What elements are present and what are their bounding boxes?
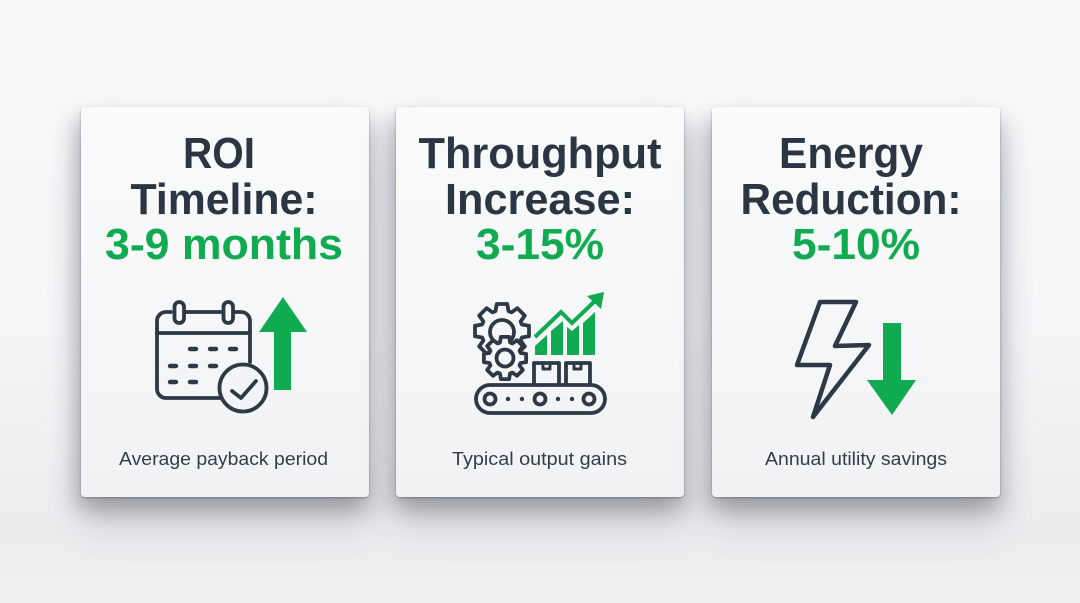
heading: Energy Reduction: Energy	[779, 129, 924, 178]
panel: throughput card	[396, 107, 684, 497]
icon: gears and conveyor	[475, 304, 605, 413]
heading: Throughput Increase: Increase:	[445, 175, 635, 224]
icon: green down arrow	[867, 323, 916, 415]
value: 5-10%: 5-10%	[792, 220, 920, 269]
icon: calendar with check	[157, 302, 266, 412]
value: 3-9 months: 3-9 months	[105, 220, 343, 269]
heading: Energy Reduction: Reduction:	[740, 175, 962, 224]
heading: Energy Reduction	[740, 129, 962, 224]
icon: green growth chart	[535, 292, 604, 355]
heading: Throughput Increase: Throughput	[418, 129, 662, 178]
heading: ROI Timeline	[130, 129, 318, 224]
heading: Throughput Increase	[418, 129, 662, 224]
value: 3-15%: 3-15%	[476, 220, 604, 269]
caption: average payback period: Average payback period	[119, 449, 328, 469]
panel: energy card	[712, 107, 1000, 497]
caption: annual utility savings: Annual utility savings	[765, 449, 947, 469]
caption: typical output gains: Typical output gains	[452, 449, 627, 469]
heading: ROI Timeline: Timeline:	[130, 175, 318, 224]
panel: ROI timeline card	[81, 107, 369, 497]
icon: green up arrow	[259, 297, 307, 390]
heading: ROI Timeline: ROI	[183, 129, 255, 178]
icon: lightning bolt	[797, 302, 869, 417]
